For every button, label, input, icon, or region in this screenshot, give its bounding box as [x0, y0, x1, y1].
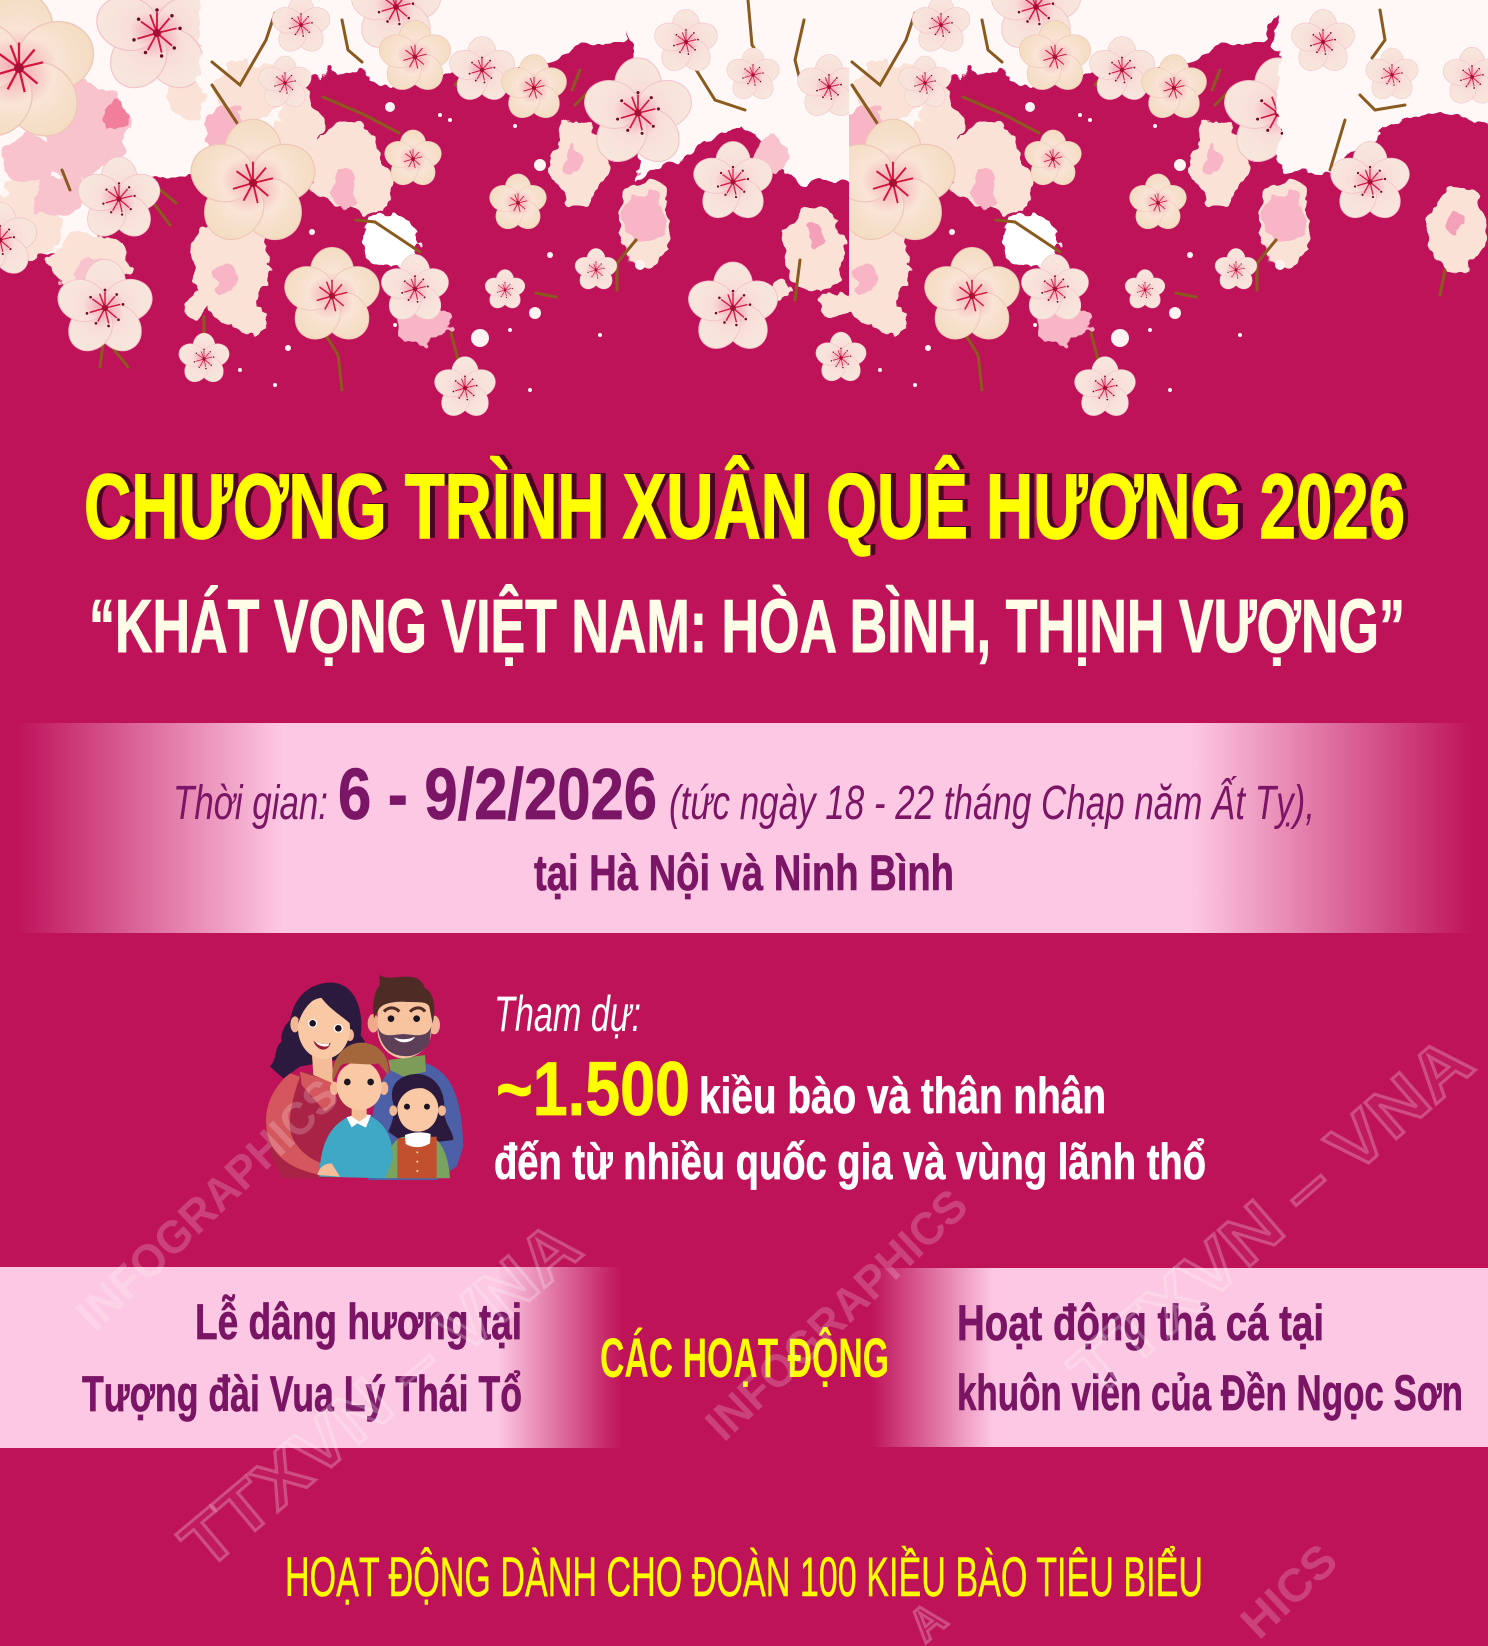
attendance text [494, 986, 1206, 1190]
attendance number: ~1.500 [496, 1047, 690, 1132]
right activity text line 1: Hoạt động thả cá tại [957, 1295, 1324, 1351]
watermarks: TTXVN – VNA [1055, 1021, 1487, 1411]
boy [317, 1043, 393, 1178]
girl [385, 1074, 453, 1178]
attendance description: kiều bào và thân nhân [699, 1068, 1106, 1124]
panel: right activity [870, 1268, 1488, 1447]
right blossom tile [849, 0, 1310, 416]
left blossom cluster [0, 0, 232, 386]
middle blossom cluster [630, 0, 869, 385]
illustration: cherry blossom branches [0, 0, 1488, 421]
watermarks: HICS [1230, 1533, 1347, 1646]
watermarks: INFOGRAPHICS [695, 1178, 978, 1450]
watermarks [66, 1021, 1487, 1646]
far right blossom cluster [1270, 0, 1488, 295]
repeat of central blossom tile [184, 0, 698, 421]
attendance label: Tham dự: [494, 986, 641, 1042]
panel: time and place [16, 723, 1475, 933]
watermarks: TTXVN – VNA [166, 1206, 595, 1583]
icon: family [266, 975, 463, 1180]
watermarks: INFOGRAPHICS [66, 1068, 349, 1340]
heading: activities: CÁC HOẠT ĐỘNG [600, 1326, 889, 1389]
woman [266, 983, 365, 1178]
left activity text line 2: Tượng đài Vua Lý Thái Tổ [82, 1366, 522, 1422]
left activity text line 1: Lễ dâng hương tại [195, 1294, 522, 1350]
attendance origin: đến từ nhiều quốc gia và vùng lãnh thổ [494, 1134, 1206, 1190]
place: tại Hà Nội và Ninh Bình [534, 845, 954, 901]
panel: left activity [0, 1267, 622, 1448]
man [368, 975, 463, 1180]
dates: 6 - 9/2/2026 [338, 755, 657, 835]
time label: Thời gian: [173, 777, 328, 830]
